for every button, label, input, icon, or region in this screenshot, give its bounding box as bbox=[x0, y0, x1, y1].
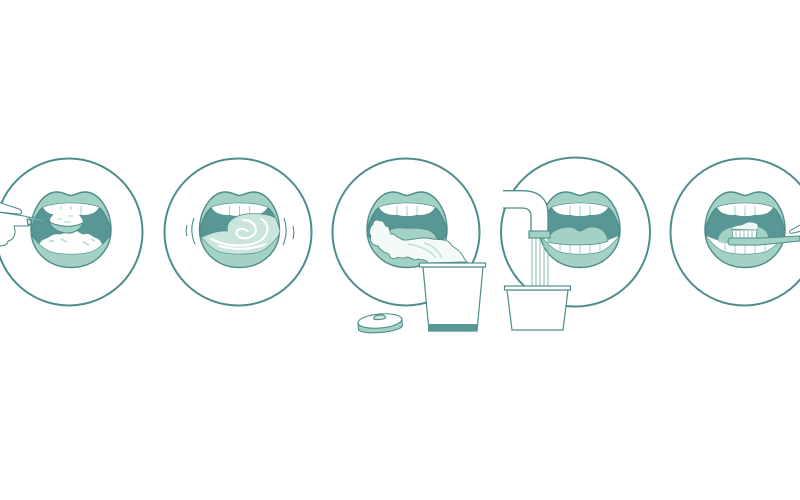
tongue bbox=[548, 227, 608, 245]
circle 1 bbox=[0, 158, 142, 306]
mouth 2 bbox=[200, 192, 282, 268]
circle 5 bbox=[670, 158, 800, 306]
tap bbox=[503, 191, 550, 238]
mouth 4 bbox=[540, 192, 620, 268]
lower food bbox=[40, 231, 102, 254]
tongue bbox=[718, 227, 769, 244]
hand bbox=[0, 202, 31, 246]
water stream bbox=[532, 238, 548, 286]
circle 4 bbox=[501, 158, 650, 306]
spoon with food bbox=[26, 209, 83, 233]
step 3: spitting oil in cup bbox=[332, 158, 486, 334]
step 5: brushing teeth bbox=[670, 158, 800, 306]
rinse cup bbox=[504, 286, 570, 330]
toothbrush bbox=[728, 222, 800, 245]
lower teeth bbox=[544, 236, 618, 254]
mouth 3 bbox=[367, 192, 447, 268]
lower teeth bbox=[707, 236, 783, 256]
mouth 1 bbox=[31, 192, 111, 268]
cup bbox=[420, 263, 486, 331]
swirl of oil bbox=[202, 214, 282, 256]
step 2: swishing oil bbox=[164, 158, 312, 306]
tongue bbox=[390, 228, 438, 240]
finger bbox=[790, 224, 800, 233]
mouth 5 bbox=[705, 192, 785, 268]
step 4: rinsing under tap bbox=[501, 158, 650, 330]
circle 3 bbox=[332, 158, 480, 306]
circle 2 bbox=[164, 158, 312, 306]
step 1: spoonful of oil in mouth bbox=[0, 158, 142, 306]
vibration lines bbox=[186, 218, 294, 245]
foam of oil bbox=[370, 220, 467, 263]
lid bbox=[357, 312, 403, 334]
